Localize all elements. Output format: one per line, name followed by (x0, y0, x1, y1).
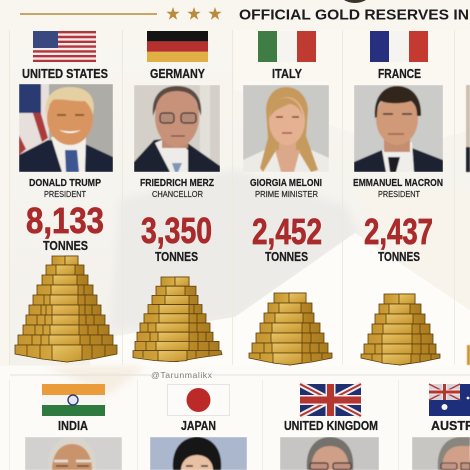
unit: TONNES (265, 250, 308, 264)
gold pyramid: United States (15, 256, 117, 362)
header: emblem edge (339, 0, 371, 3)
panel: Italy (243, 31, 332, 365)
leader role: CHANCELLOR (152, 189, 203, 199)
country name: UNITED KINGDOM (284, 419, 378, 433)
flag: United States (33, 31, 96, 62)
reserve figure: 2,437 (364, 211, 433, 252)
country name: UNITED STATES (22, 67, 108, 81)
panel: India (25, 384, 122, 470)
gold pyramid: France (361, 294, 440, 365)
portrait: Friedrich Merz (134, 85, 220, 172)
portrait: Giorgia Meloni (243, 85, 329, 172)
leader name: EMMANUEL MACRON (353, 177, 443, 189)
flag: India (42, 384, 105, 416)
leader role: PRESIDENT (378, 189, 420, 199)
unit: TONNES (378, 250, 420, 264)
country name: GERMANY (150, 67, 206, 81)
unit: TONNES (155, 250, 198, 264)
leader name: DONALD TRUMP (29, 177, 101, 189)
flag: Japan (168, 384, 230, 416)
flag: Germany (147, 31, 208, 62)
country name: JAPAN (181, 419, 216, 433)
title: OFFICIAL GOLD RESERVES IN (239, 6, 469, 24)
reserve figure: 2,452 (252, 211, 322, 252)
header: gold rule and three stars (20, 7, 222, 20)
portrait: Keir Starmer (280, 437, 379, 470)
leader name: GIORGIA MELONI (250, 177, 322, 189)
leader name: FRIEDRICH MERZ (140, 177, 214, 189)
panel: Germany (133, 31, 222, 362)
panel: France (353, 31, 443, 365)
flag: France (370, 31, 428, 62)
unit: TONNES (43, 239, 88, 253)
flag: United Kingdom (300, 384, 361, 416)
panel: United States (15, 31, 117, 362)
watermark: @Tarunmalikx (151, 370, 213, 380)
portrait: Emmanuel Macron (354, 85, 443, 172)
gold pyramid: Germany (133, 277, 222, 362)
country name: FRANCE (378, 67, 421, 81)
leader role: PRIME MINISTER (255, 189, 318, 199)
country name: ITALY (272, 67, 303, 81)
leader role: PRESIDENT (44, 189, 86, 199)
portrait: Sanae Takaichi (150, 437, 247, 470)
portrait: Donald Trump (19, 84, 113, 172)
next card edge (466, 85, 470, 365)
panel: Australia (412, 384, 470, 470)
panel: United Kingdom (280, 384, 379, 470)
flag: Australia (429, 384, 470, 416)
reserve figure: 8,133 (26, 200, 104, 241)
flag: Italy (258, 31, 316, 62)
country name: INDIA (58, 419, 88, 433)
reserve figure: 3,350 (141, 210, 212, 251)
lower card dividers (9, 380, 399, 470)
portrait: Narendra Modi (25, 437, 122, 470)
card dividers (9, 30, 455, 365)
gold pyramid: Italy (249, 293, 332, 365)
panel: Japan (150, 384, 247, 470)
row separator line (10, 374, 470, 376)
portrait: Anthony Albanese (412, 437, 470, 470)
